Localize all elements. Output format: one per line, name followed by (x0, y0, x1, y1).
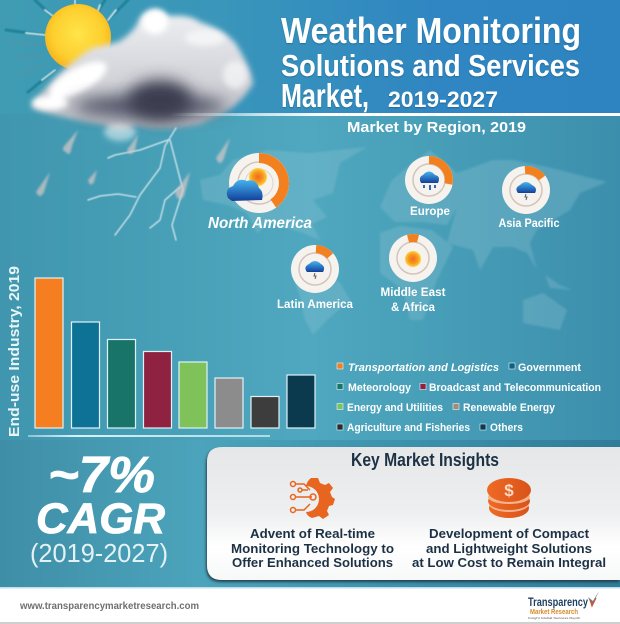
region: Middle East and Africa: & Africa (391, 302, 436, 314)
legend (337, 362, 601, 434)
CAGR callout: CAGR (36, 495, 165, 543)
sun with rays (6, 0, 128, 92)
region: North America (208, 153, 312, 232)
legend: Energy and Utilities (347, 402, 443, 414)
raindrops (36, 130, 230, 199)
legend: Transportation and Logistics (348, 362, 499, 374)
legend: Agriculture and Fisheries (347, 422, 470, 434)
insight: compact solutions: Development of Compact (429, 526, 590, 541)
insight: real-time monitoring (231, 526, 394, 570)
insight: real-time monitoring: Monitoring Technology to (231, 541, 394, 556)
heading: Key Market Insights (351, 449, 499, 470)
logo (528, 591, 599, 620)
region: North America: North America (208, 215, 312, 232)
region: Europe: Europe (410, 206, 450, 218)
insight: compact solutions: and Lightweight Solutions (426, 541, 592, 556)
legend: Broadcast and Telecommunication (429, 382, 601, 394)
legend: Renewable Energy (463, 402, 556, 414)
icon: gear with circuit (290, 478, 335, 519)
CAGR callout (30, 446, 168, 568)
bar chart (35, 278, 315, 428)
logo: Market Research (530, 607, 578, 616)
insight: real-time monitoring: Advent of Real-time (250, 526, 375, 541)
legend: Government (518, 362, 581, 374)
chart baseline (28, 435, 270, 437)
title: Solutions and Services (281, 48, 580, 83)
region: Asia Pacific (498, 166, 560, 230)
axis label: End-use Industry, 2019 (6, 266, 23, 437)
footer (0, 587, 620, 624)
website url: www.transparencymarketresearch.com (19, 601, 199, 612)
lightning (88, 128, 183, 240)
CAGR callout: (2019-2027) (30, 538, 168, 568)
CAGR callout: ~7% (48, 446, 155, 503)
insight: real-time monitoring: Offer Enhanced Solutions (232, 555, 393, 570)
region: Latin America: Latin America (277, 299, 354, 311)
logo: Insight Global Success Depth (528, 616, 580, 620)
insight: compact solutions (412, 526, 606, 570)
panel: key market insights (207, 447, 620, 580)
region: Middle East and Africa (380, 234, 446, 314)
title (281, 10, 581, 114)
title: 2019-2027 (388, 87, 498, 112)
map heading: Market by Region, 2019 (347, 119, 526, 136)
icon: coin stack (487, 478, 531, 518)
region: Asia Pacific: Asia Pacific (498, 218, 560, 230)
title divider (170, 113, 620, 116)
icon: coin stack: $ (504, 481, 514, 500)
region: Latin America (277, 245, 354, 311)
logo: Transparency (528, 597, 588, 609)
storm cloud (32, 9, 253, 141)
title: Market, (281, 77, 369, 114)
region: Middle East and Africa: Middle East (380, 287, 446, 299)
world map (200, 147, 607, 335)
insight: compact solutions: at Low Cost to Remain Integral (412, 555, 606, 570)
region: Europe (405, 156, 453, 218)
legend: Others (490, 422, 523, 434)
legend: Meteorology (348, 382, 412, 394)
title: Weather Monitoring (281, 10, 581, 51)
